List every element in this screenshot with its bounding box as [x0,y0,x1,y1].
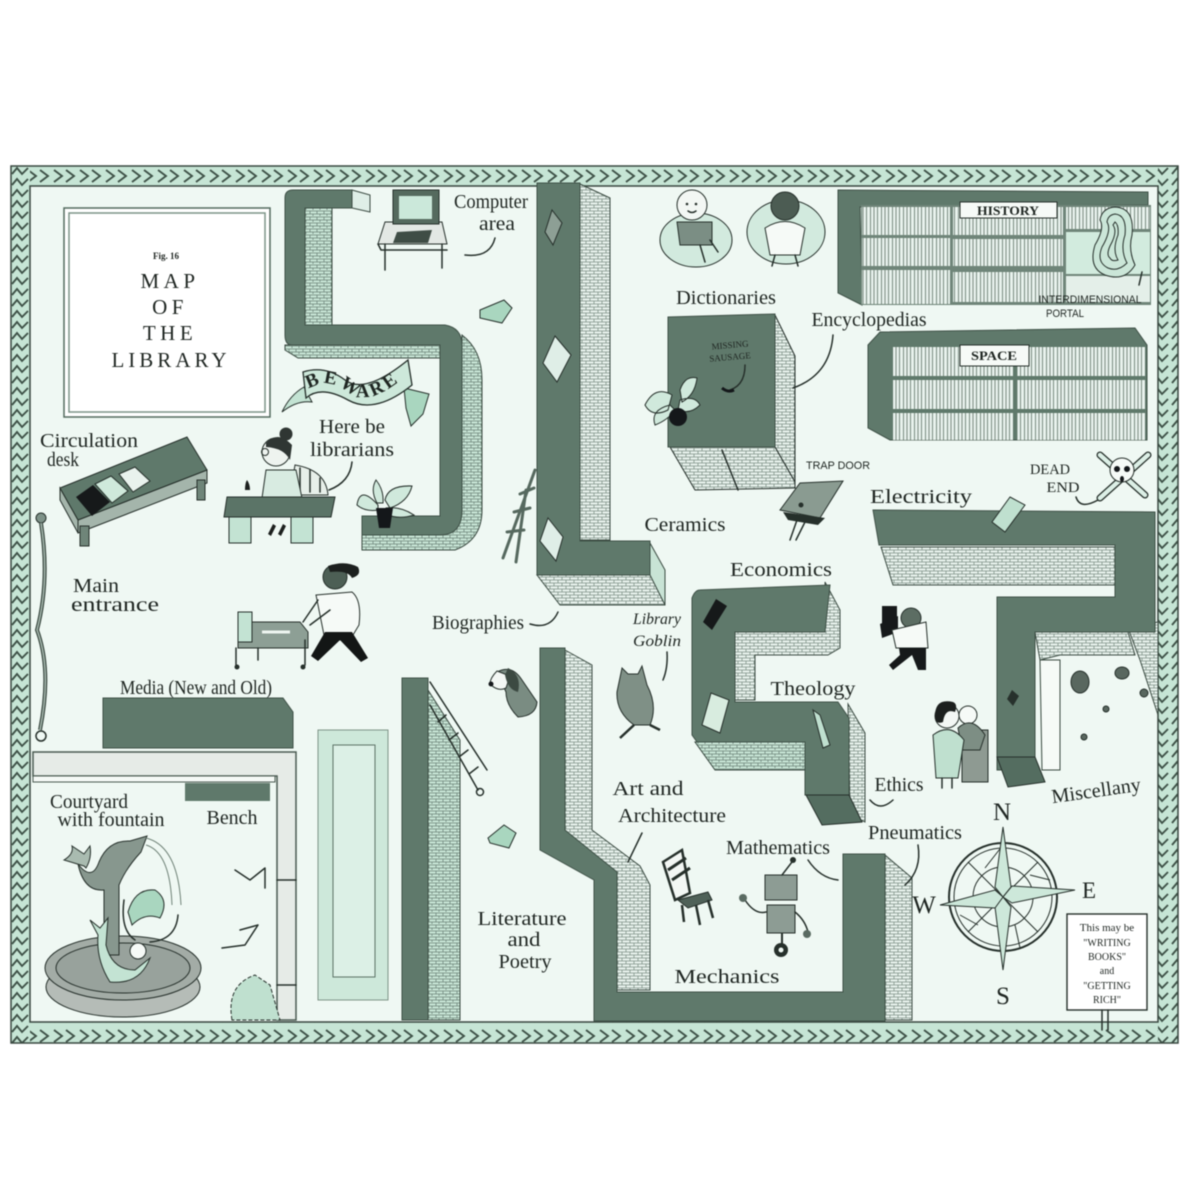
icon: mint book on electricity wall [992,497,1025,532]
label: interdimensional portal [1038,294,1142,320]
panel: title card: THE [143,321,197,345]
shelf: media [103,698,293,748]
label: main entrance [71,575,159,616]
panel: title card [64,208,270,417]
icon: potted plant near wall [357,480,414,528]
label: literature and poetry: Literature [478,908,567,930]
label: circulation desk: Circulation [40,430,138,452]
figure: robot [739,857,811,957]
figure: library goblin [617,666,660,738]
label: computer area: area [479,213,515,235]
label: pneumatics [868,822,962,885]
ladder against L wall [503,470,535,562]
label: biographies: Biographies [432,612,524,634]
icon: dog [488,668,537,717]
readers on beanbags [660,190,825,267]
label: art and architecture: Art and [612,778,684,800]
label: here be librarians [310,416,394,490]
shelf: economics, theology, ethics [692,582,865,825]
label: main entrance: Main [73,575,119,597]
note sign: and [1100,966,1114,977]
icon: bush [231,975,280,1020]
label: computer area: Computer [454,191,528,213]
icon: mint book on theology wall [702,693,729,733]
courtyard walls [33,752,296,1020]
note sign [1067,914,1147,1030]
label: literature and poetry: and [508,929,540,951]
icon: skull and crossbones [1100,455,1148,498]
panel: title card: OF [152,295,188,319]
label: ceramics: Ceramics [644,514,726,536]
shelf: literature and poetry wall [402,678,460,1020]
label: bench: Bench [206,807,258,829]
label: mechanics: Mechanics [674,966,780,988]
figure: librarian at desk [224,428,335,543]
label: circulation desk [40,430,138,471]
panel: title card: MAP [140,269,200,293]
icon: compass rose: N [993,799,1011,826]
label: art and architecture [612,778,726,862]
label: miscellany: Miscellany [1050,774,1142,808]
bookcase: space: SPACE [971,348,1017,363]
shelf: art and architecture and mechanics wall [540,648,912,1021]
figures: couple embracing [933,701,988,788]
bookcase: history: HISTORY [977,203,1040,218]
note sign: "GETTING [1083,981,1131,992]
icon: open book on wall middle [543,336,571,382]
icon: thin book on ethics wall [813,710,830,748]
shelf: S-shaped wall near computer area [285,190,482,550]
label: main entrance: entrance [71,594,159,616]
label: ethics [870,774,924,806]
label: encyclopedias: Encyclopedias [812,309,927,331]
label: literature and poetry [478,908,567,973]
icon: compass rose [912,799,1096,1010]
rocks on floor [1071,667,1148,740]
banner: beware: BEWARE [304,370,398,398]
banner: beware [281,358,430,428]
ladder on literature wall [430,682,487,796]
rug [318,730,388,1000]
icon: black book on economics wall [703,599,727,630]
note sign: "WRITING [1083,938,1131,949]
note sign: This may be [1080,922,1134,934]
label: here be librarians: Here be [319,416,385,438]
label: economics: Economics [730,559,832,581]
label: interdimensional portal: INTERDIMENSIONAL [1038,294,1142,306]
label: library goblin: Library [632,611,682,628]
icon: loose book [480,300,512,323]
icon: interdimensional portal [1093,207,1142,285]
label: art and architecture: Architecture [618,805,726,827]
bench [185,783,270,801]
shelf: dictionaries: SAUSAGE [709,350,752,364]
bookcase: space [868,328,1147,440]
figure: person pushing book cart [234,563,368,670]
icon: compass rose: E [1082,878,1096,903]
fountain with dolphin [45,836,201,1017]
label: computer area [454,191,528,255]
paving cracks [222,868,265,948]
icon: compass rose: S [996,983,1010,1010]
label: library goblin: Goblin [633,633,681,650]
icon: loose book lower [488,825,516,848]
label: electricity: Electricity [870,486,972,508]
icon: book on wall top [545,210,562,245]
label: pneumatics: Pneumatics [868,822,962,844]
label: trap door: TRAP DOOR [806,460,870,472]
label: circulation desk: desk [47,449,79,471]
label: dead end: DEAD [1030,462,1070,478]
label: encyclopedias [793,309,927,388]
label: courtyard with fountain: Courtyard [50,791,128,813]
label: courtyard with fountain: with fountain [58,809,164,831]
label: courtyard with fountain [50,791,164,831]
decorative patterned border [11,166,1178,1043]
circulation desk [60,437,207,546]
label: interdimensional portal: PORTAL [1046,308,1084,320]
label: mathematics: Mathematics [726,837,830,859]
icon: potted plant on dictionaries [645,378,700,426]
label: mathematics [726,837,838,880]
icon: computer desk [378,190,447,270]
label: dead end: END [1046,480,1080,496]
icon: book on wall lower [540,518,563,561]
shelf: dictionaries: MISSING [711,338,749,352]
panel: title card: Fig. 16 [153,251,179,261]
label: here be librarians: librarians [310,439,394,461]
icon: chair [663,850,713,925]
icon: trap door [780,481,843,540]
label: media: Media (New and Old) [120,677,272,699]
note sign: RICH" [1093,995,1121,1006]
label: literature and poetry: Poetry [498,951,552,973]
shelf: dictionaries [668,314,795,490]
rope barrier at main entrance [36,513,46,741]
shelf: tall L-shaped wall [537,183,665,605]
figure: person carrying books [880,606,928,670]
icon: compass rose: W [912,892,936,919]
bookcase: history [838,190,1151,305]
shelf: electricity and miscellany [873,497,1158,787]
label: library goblin [632,611,682,680]
label: theology: Theology [770,678,856,700]
label: dictionaries: Dictionaries [676,287,776,309]
map background [28,184,1160,1022]
icon: small dark book on miscellany wall [1007,690,1019,706]
panel: title card: LIBRARY [111,348,231,372]
label: dead end [1030,462,1098,504]
label: ethics: Ethics [874,774,924,796]
note sign: BOOKS" [1088,952,1126,963]
